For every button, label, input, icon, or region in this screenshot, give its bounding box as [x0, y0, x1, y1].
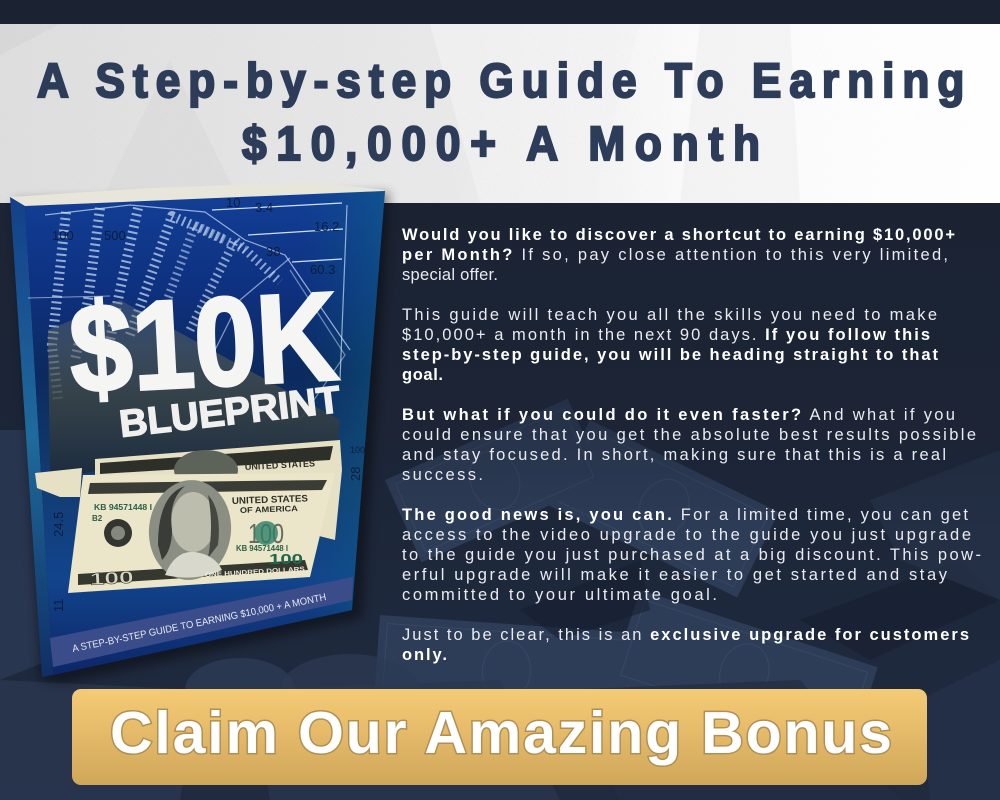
paragraph 4: The good news is, you can. For a limited time, you can get — [402, 506, 968, 524]
paragraph 4 — [402, 506, 981, 604]
blueprint dimension labels: 500 — [104, 228, 126, 243]
paragraph 5 — [402, 626, 969, 664]
front dollar bill — [68, 473, 335, 593]
paragraph 3: could ensure that you get the absolute best results possible — [402, 426, 976, 444]
cover subtitle band — [50, 577, 353, 667]
blueprint dimension labels: 16.2 — [314, 219, 339, 234]
blueprint dimension labels — [51, 195, 365, 612]
paragraph 4: access to the video upgrade to the guide you just upgrade — [402, 526, 971, 544]
book front cover — [25, 191, 385, 675]
front dollar bill: 100 — [89, 568, 134, 589]
bill seal — [104, 519, 132, 547]
bill serial numbers: KB 94571448 I — [94, 502, 152, 512]
title — [37, 53, 964, 170]
front dollar bill: B2 — [92, 514, 103, 523]
blueprint dimension labels: 100 — [350, 445, 365, 455]
paragraph 1 — [402, 226, 955, 284]
rear dollar bill: UNITED STATES — [245, 458, 315, 472]
paragraph 1: per Month? If so, pay close attention to this very limited, — [402, 246, 948, 264]
front dollar bill: ONE HUNDRED DOLLARS — [205, 566, 306, 579]
ebook cover: $10K Blueprint — [10, 182, 390, 684]
paragraph 4: to the guide you just purchased at a big discount. This pow- — [402, 546, 981, 564]
front dollar bill: 100 — [248, 518, 284, 549]
bill lettering: UNITED STATES — [232, 493, 308, 507]
book page block — [10, 182, 384, 207]
paragraph 4: erful upgrade will make it easier to get started and stay — [402, 566, 948, 584]
button body — [72, 689, 927, 785]
rear dollar bill — [95, 440, 342, 540]
title: $10,000+ A Month — [242, 116, 760, 170]
paragraph 5: Just to be clear, this is an exclusive upgrade for customers — [402, 626, 969, 644]
blueprint dimension labels: 60.3 — [310, 262, 335, 277]
paragraph 4: committed to your ultimate goal. — [402, 586, 717, 604]
paragraph 3 — [402, 406, 976, 484]
paragraph 2 — [402, 306, 938, 384]
blueprint dimension labels: 10 — [226, 195, 240, 210]
call-to-action button — [72, 689, 927, 785]
paragraph 3: and stay focused. In short, making sure that this is a real — [402, 446, 946, 464]
blueprint dimension labels: 3.4 — [255, 200, 273, 215]
paragraph 2: goal. — [402, 366, 443, 384]
paragraph 2: $10,000+ a month in the next 90 days. If you follow this — [402, 326, 930, 344]
book shadow — [14, 192, 390, 684]
paragraph 1: Would you like to discover a shortcut to earning $10,000+ — [402, 226, 955, 244]
paragraph 3: success. — [402, 466, 483, 484]
cover title: $10K: $10K — [66, 265, 341, 420]
paragraph 2: This guide will teach you all the skills you need to make — [402, 306, 937, 324]
front dollar bill: OF AMERICA — [240, 504, 298, 515]
blueprint drawing — [28, 203, 350, 420]
body copy — [402, 226, 981, 664]
front dollar bill: KB 94571448 I — [236, 544, 288, 553]
paragraph 2: step-by-step guide, you will be heading straight to that — [402, 346, 938, 364]
blueprint dimension labels: 11 — [51, 598, 66, 612]
right edge tint — [300, 191, 385, 620]
button label: Claim Our Amazing Bonus — [110, 700, 892, 766]
fanned bills behind the title — [48, 300, 340, 480]
title: A Step-by-step Guide To Earning — [37, 53, 964, 107]
bill portrait — [144, 476, 236, 584]
paragraph 3: But what if you could do it even faster? And what if you — [402, 406, 955, 424]
background: scattered dollar bills — [0, 203, 1000, 800]
left bill edges — [35, 468, 82, 497]
blueprint dimension labels: 100 — [52, 228, 74, 243]
cover title: BLUEPRINT: BLUEPRINT — [117, 379, 343, 446]
cover subtitle: A STEP-BY-STEP GUIDE TO EARNING $10,000 + A MONTH — [71, 592, 327, 655]
paragraph 5: only. — [402, 646, 447, 664]
book spine — [10, 197, 53, 677]
paragraph 1: special offer. — [402, 266, 498, 284]
header band — [0, 24, 1000, 203]
blueprint dimension labels: 28 — [348, 467, 363, 481]
blueprint dimension labels: 38 — [266, 244, 280, 259]
front dollar bill: 100 — [269, 551, 303, 568]
blueprint dimension labels: 24.5 — [51, 512, 66, 537]
